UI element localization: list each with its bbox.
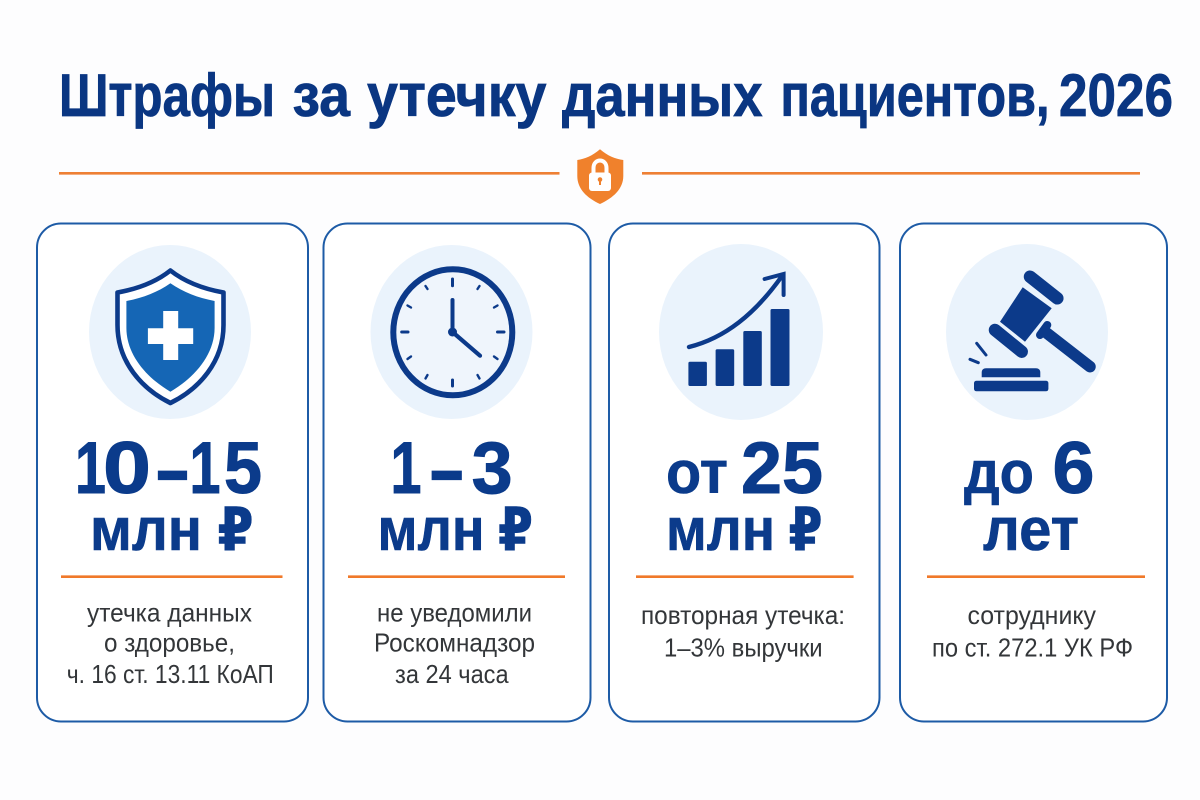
description: сотруднику — [968, 600, 1096, 630]
amount: up to 6 years: лет — [983, 496, 1079, 563]
amount: 1–3 million rubles: 3 — [472, 428, 513, 509]
description: ч. 16 ст. 13.11 КоАП — [67, 659, 274, 689]
amount: 10–15 million rubles: млн — [90, 496, 202, 563]
description — [67, 598, 274, 689]
description: утечка данных — [87, 598, 252, 628]
amount: 10–15 million rubles — [75, 428, 262, 563]
amount: from 25 million rubles: млн — [666, 496, 775, 563]
description: за 24 часа — [395, 659, 509, 689]
amount: 10–15 million rubles: 1 — [190, 428, 220, 509]
description: повторная утечка: — [641, 600, 845, 630]
panel: criminal liability — [900, 224, 1167, 722]
amount: 1–3 million rubles — [378, 428, 533, 563]
description: по ст. 272.1 УК РФ — [932, 632, 1133, 662]
title: 2026 — [1059, 62, 1173, 129]
panel: repeat leak — [609, 224, 880, 722]
amount: 10–15 million rubles: 1 — [75, 428, 106, 509]
panel: fine for health data leak — [37, 224, 308, 722]
title: данных — [562, 62, 762, 129]
amount: from 25 million rubles: ₽ — [788, 496, 822, 563]
description — [641, 600, 845, 662]
amount: 1–3 million rubles: ₽ — [498, 496, 533, 563]
amount: 10–15 million rubles: – — [157, 430, 188, 511]
amount: from 25 million rubles: от — [666, 439, 728, 506]
icon: medical shield — [118, 270, 224, 403]
amount: up to 6 years — [964, 428, 1094, 563]
amount: 10–15 million rubles: 5 — [224, 428, 262, 509]
description: о здоровье, — [104, 628, 235, 658]
icon: clock — [393, 269, 512, 395]
amount: from 25 million rubles: 5 — [782, 428, 823, 509]
amount: from 25 million rubles — [666, 428, 823, 563]
icon: orange shield with padlock — [577, 149, 623, 204]
description: Роскомнадзор — [374, 628, 535, 658]
description — [374, 598, 535, 689]
description — [932, 600, 1133, 662]
title: пациентов, — [780, 62, 1050, 129]
amount: 1–3 million rubles: 1 — [390, 428, 422, 509]
amount: up to 6 years: 6 — [1052, 428, 1094, 509]
title: утечку — [367, 62, 547, 129]
icon: judge gavel — [970, 277, 1090, 391]
amount: from 25 million rubles: 2 — [741, 428, 782, 509]
icon: growth bar chart with arrow — [688, 274, 790, 386]
amount: 1–3 million rubles: – — [431, 430, 463, 511]
amount: 1–3 million rubles: млн — [378, 496, 484, 563]
amount: up to 6 years: до — [964, 439, 1034, 506]
description: не уведомили — [377, 598, 532, 628]
description: 1–3% выручки — [664, 632, 823, 662]
title: за — [292, 62, 351, 129]
header divider with badge — [59, 149, 1140, 204]
amount: 10–15 million rubles: ₽ — [218, 496, 254, 563]
amount: 10–15 million rubles: 0 — [103, 428, 151, 509]
title: Штрафы — [59, 62, 275, 129]
panel: failure to notify regulator — [324, 224, 590, 722]
title — [59, 62, 1173, 129]
